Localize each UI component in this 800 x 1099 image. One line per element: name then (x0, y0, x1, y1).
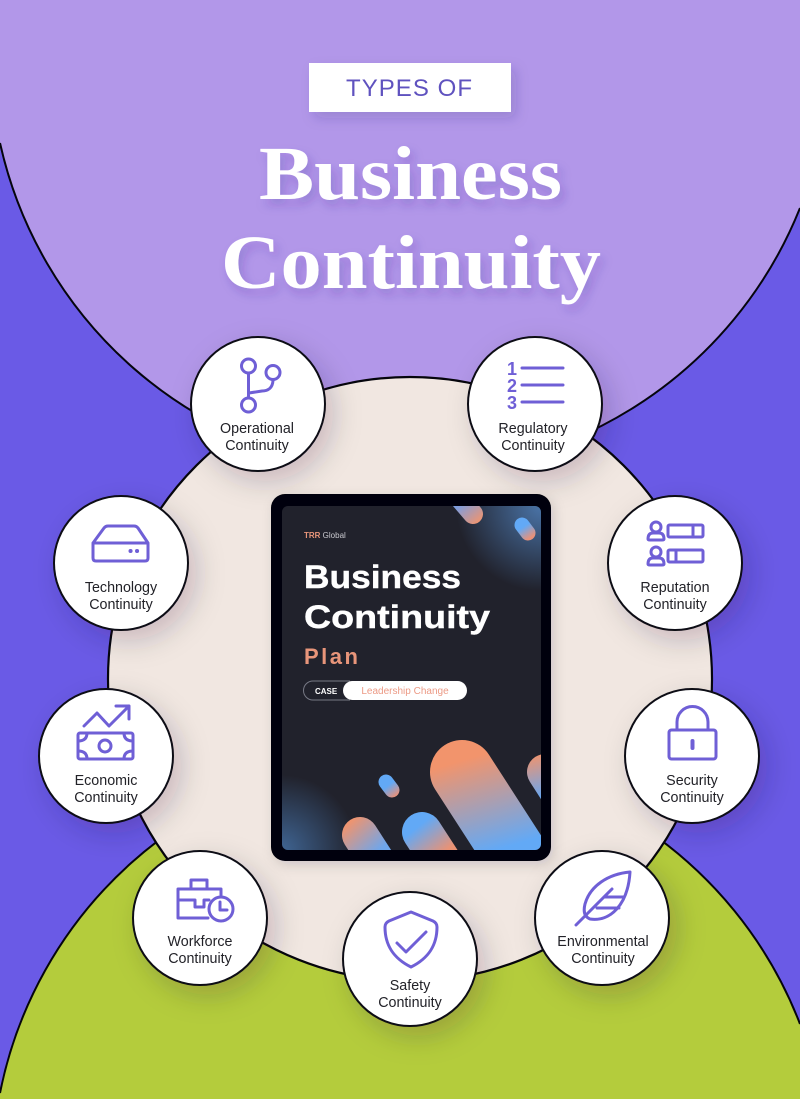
tablet: business continuity plan cover: Business (304, 559, 461, 595)
icon: numbered list: 2 (507, 376, 517, 396)
node: security continuity (625, 689, 759, 823)
title: Continuity (221, 221, 601, 305)
node: regulatory continuity: Regulatory (498, 421, 568, 437)
tablet: business continuity plan cover: TRR Global (304, 531, 346, 540)
icon: padlock (669, 706, 716, 759)
node: safety continuity: Safety (390, 978, 431, 994)
tablet: business continuity plan cover: CASE (315, 687, 338, 696)
node: reputation continuity (608, 496, 742, 630)
tablet: business continuity plan cover: Continuity (304, 599, 490, 635)
node: operational continuity: Continuity (225, 438, 290, 454)
node: technology continuity (54, 496, 188, 630)
node: reputation continuity: Continuity (643, 597, 708, 613)
heading: types of tag (309, 63, 511, 112)
node: environmental continuity (535, 851, 669, 985)
icon: numbered list: 1 (507, 359, 517, 379)
node: environmental continuity: Continuity (571, 951, 636, 967)
panel: central beige circle (108, 377, 712, 981)
node: technology continuity: Continuity (89, 597, 154, 613)
node: safety continuity (343, 892, 477, 1026)
title (221, 132, 601, 305)
icon: branching flow (242, 359, 280, 412)
node: environmental continuity: Environmental (557, 934, 649, 950)
node: workforce continuity: Workforce (168, 934, 232, 950)
node: regulatory continuity: Continuity (501, 438, 566, 454)
panel: bottom green circle (0, 756, 800, 1099)
node: security continuity: Security (666, 773, 719, 789)
node: regulatory continuity (468, 337, 602, 471)
node: economic continuity (39, 689, 173, 823)
node: operational continuity: Operational (220, 421, 294, 437)
tablet: business continuity plan cover: Leadership Change (361, 686, 449, 697)
icon: banknote with rising arrow (78, 706, 133, 759)
node: safety continuity: Continuity (378, 995, 443, 1011)
node: workforce continuity (133, 851, 267, 985)
icon: leaf (576, 872, 630, 925)
icon: numbered list (507, 359, 563, 413)
icon: briefcase and clock (178, 880, 233, 921)
icon: numbered list: 3 (507, 393, 517, 413)
node: workforce continuity: Continuity (168, 951, 233, 967)
title: Business (259, 132, 562, 216)
icon: people with rating bars (648, 522, 703, 565)
heading: types of tag: TYPES OF (346, 75, 472, 102)
icon: shield with check (385, 912, 437, 967)
panel: top lilac circle (0, 0, 800, 472)
tablet: business continuity plan cover: Plan (304, 644, 358, 669)
node: reputation continuity: Reputation (640, 580, 710, 596)
node: economic continuity: Economic (75, 773, 137, 789)
node: economic continuity: Continuity (74, 790, 139, 806)
node: technology continuity: Technology (85, 580, 158, 596)
tablet: business continuity plan cover (270, 494, 558, 870)
node: operational continuity (191, 337, 325, 471)
icon: server box (93, 526, 148, 561)
node: security continuity: Continuity (660, 790, 725, 806)
